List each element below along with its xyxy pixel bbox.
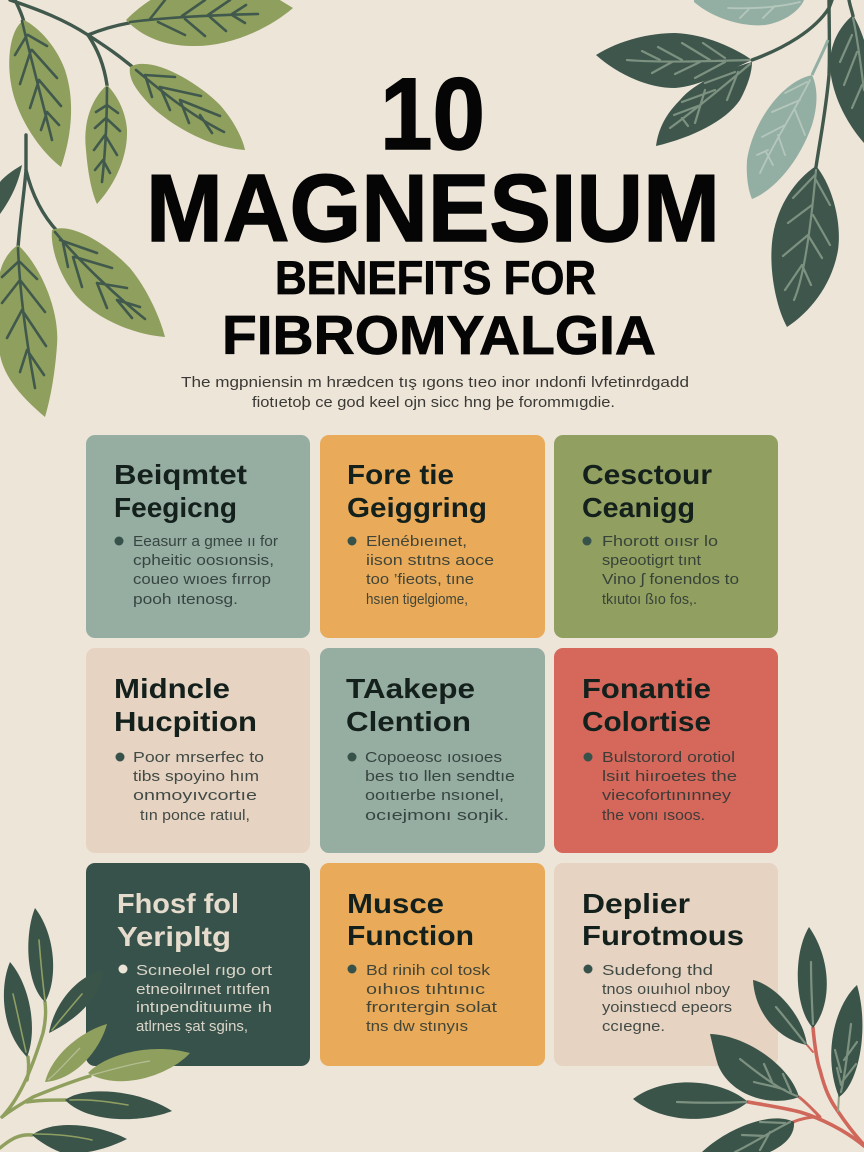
panel: card 4 [86, 648, 310, 853]
card 1 text: cpheitic oosıonsis, [133, 552, 274, 569]
card 2 heading [347, 459, 487, 523]
panel: card 7 [86, 863, 310, 1066]
card 6 text: the vonı ısoos. [602, 807, 705, 824]
card 9 heading: Furotmous [582, 920, 744, 951]
card 7 bullet [118, 964, 128, 974]
panel: card 6 [554, 648, 778, 853]
card 3 text: speootigrt tınt [602, 552, 702, 569]
card 8 text: frorıtergin solat [366, 999, 498, 1016]
card 5 text: bes tıo llen sendtıe [365, 768, 515, 785]
title: 10: 10 [380, 57, 485, 171]
card 2 bullet [348, 536, 356, 546]
card 2 text: iison stıtns aoce [366, 552, 494, 569]
card 8 heading: Function [347, 920, 474, 951]
card 6 bullet [584, 752, 592, 762]
card 8 text: tns dw stınyıs [366, 1018, 468, 1035]
card 5 text: Copoeosc ıosıoes [365, 749, 502, 766]
panel: card 2 [320, 435, 545, 638]
card 7 text: etneoilrınet rıtıfen [136, 981, 270, 998]
card 4 text: Poor mrserfec to [133, 749, 264, 766]
card 7 heading [117, 888, 239, 952]
card 3 text: tkıutoı ßıo fos,. [602, 591, 697, 608]
card 5 heading: Clention [346, 706, 471, 737]
card 4 heading: Hucpition [114, 706, 257, 737]
card 6 text: viecofortınınney [602, 787, 732, 804]
card 4 text: tın ponce ratıul, [140, 807, 250, 824]
card 9 heading [582, 888, 744, 951]
card 8 text: oıhıos tıhtınıc [366, 981, 486, 998]
card 7 heading: Yeripltg [117, 921, 231, 952]
card 6 heading: Colortise [582, 706, 711, 737]
icon: top-right dark branch [596, 0, 864, 327]
icon: bottom-left branch [0, 908, 190, 1152]
card 8 heading [347, 888, 474, 951]
card 2 heading: Geiggring [347, 492, 487, 523]
card 2 text [366, 533, 494, 608]
card 8 text [366, 962, 498, 1035]
title: magnesium: MAGNESIUM [146, 155, 720, 262]
card 1 text: coueo wıoes fırrop [133, 571, 271, 588]
card 5 heading [346, 673, 475, 737]
card 8 text: Bd rinih col tosk [366, 962, 491, 979]
card 6 heading [582, 673, 711, 737]
card 7 text: intıpenditıuıme ıh [136, 999, 272, 1016]
card 7 text: atlrnes ṣat sgins, [136, 1018, 248, 1035]
card 4 text [133, 749, 264, 824]
panel: card 5 [320, 648, 545, 853]
card 7 heading: Fhosf fol [117, 888, 239, 919]
card 1 bullet [114, 536, 124, 546]
card 3 heading: Ceanigg [582, 492, 695, 523]
panel: card 3 [554, 435, 778, 638]
icon: bottom-right branch [633, 927, 864, 1152]
card 1 text: pooh ıtenosg. [133, 591, 238, 608]
intro text [181, 374, 689, 411]
card 5 bullet [348, 752, 356, 762]
title: fibromyalgia: FIBROMYALGIA [222, 304, 656, 366]
card 1 heading: Feegicng [114, 492, 237, 523]
card 6 text: lsiıt hiıroetes the [602, 768, 737, 785]
panel: card 8 [320, 863, 545, 1066]
card 6 text: Bulstorord orotiol [602, 749, 735, 766]
card 3 text [602, 533, 739, 608]
card 4 text: tibs spoyino hım [133, 768, 259, 785]
card 3 text: Fhorott oıısr lo [602, 533, 718, 550]
card 5 text [365, 749, 515, 824]
card 8 bullet [348, 964, 356, 974]
card 9 text: Sudefong thd [602, 962, 713, 979]
card 4 heading [114, 673, 257, 737]
card 5 text: ooıtıerbe nsıonel, [365, 787, 504, 804]
card 2 heading: Fore tie [347, 459, 454, 490]
card 4 heading: Midncle [114, 673, 230, 704]
card 9 heading: Deplier [582, 888, 690, 919]
card 7 text [136, 962, 273, 1035]
card 9 text: yoinstıecd epeors [602, 999, 732, 1016]
card 1 text [133, 533, 278, 608]
card 1 heading [114, 459, 247, 523]
card 2 text: hsıen tigelgiome, [366, 591, 468, 608]
card 3 heading: Cesctour [582, 459, 712, 490]
card 8 heading: Musce [347, 888, 444, 919]
card 1 text: Eeasurr a gmee ıı for [133, 533, 278, 550]
intro text: fiotıetoþ ce god keel ojn sicc hng þe forommıgdie. [252, 394, 615, 411]
card 4 text: onmoyıvcortıe [133, 787, 257, 804]
card 9 text [602, 962, 732, 1035]
panel: card 1 [86, 435, 310, 638]
card 3 bullet [582, 536, 592, 546]
card 2 text: too ’fieots, tıne [366, 571, 474, 588]
card 1 heading: Beiqmtet [114, 459, 247, 490]
card 4 bullet [116, 752, 124, 762]
panel: card 9 [554, 863, 778, 1066]
card 2 text: Elenébıeınet, [366, 533, 467, 550]
card 3 heading [582, 459, 712, 523]
card 3 text: Vino ʃ fonendos to [602, 571, 739, 588]
card 5 heading: TAakepe [346, 673, 475, 704]
title block [146, 57, 720, 366]
card 6 text [602, 749, 737, 824]
card 7 text: Scıneolel ɾıgo ort [136, 962, 273, 979]
card 6 heading: Fonantie [582, 673, 711, 704]
card 9 text: tnos oıuıhıol nboy [602, 981, 731, 998]
card 9 text: ccıegne. [602, 1018, 665, 1035]
title: benefits for: BENEFITS FOR [275, 251, 596, 304]
icon: top-left olive branch [0, 0, 293, 417]
card 9 bullet [584, 964, 592, 974]
card 5 text: ocıejmonı soŋik. [365, 807, 509, 824]
intro text: The mgpniensin m hrædcen tış ıgons tıeo inor ındonfi lvfetinrdgadd [181, 374, 689, 391]
